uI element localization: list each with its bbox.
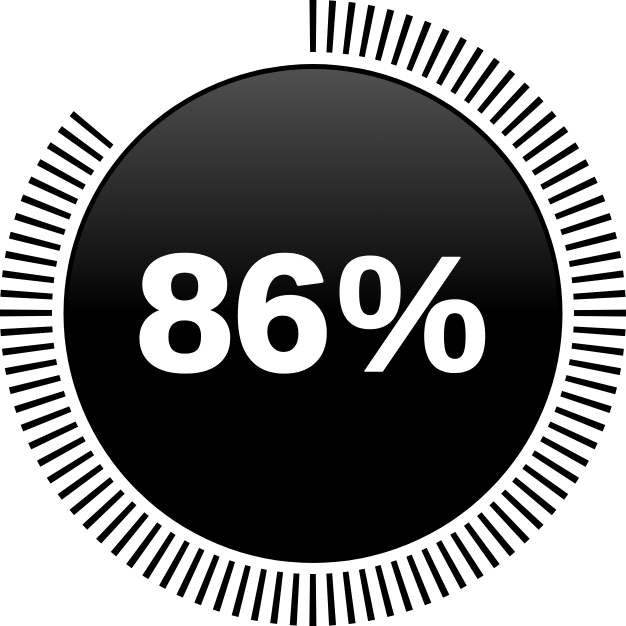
percentage value: 86 [136,221,331,405]
percentage value: % [336,222,489,406]
percentage value [136,221,489,406]
black glossy disc [64,64,562,563]
